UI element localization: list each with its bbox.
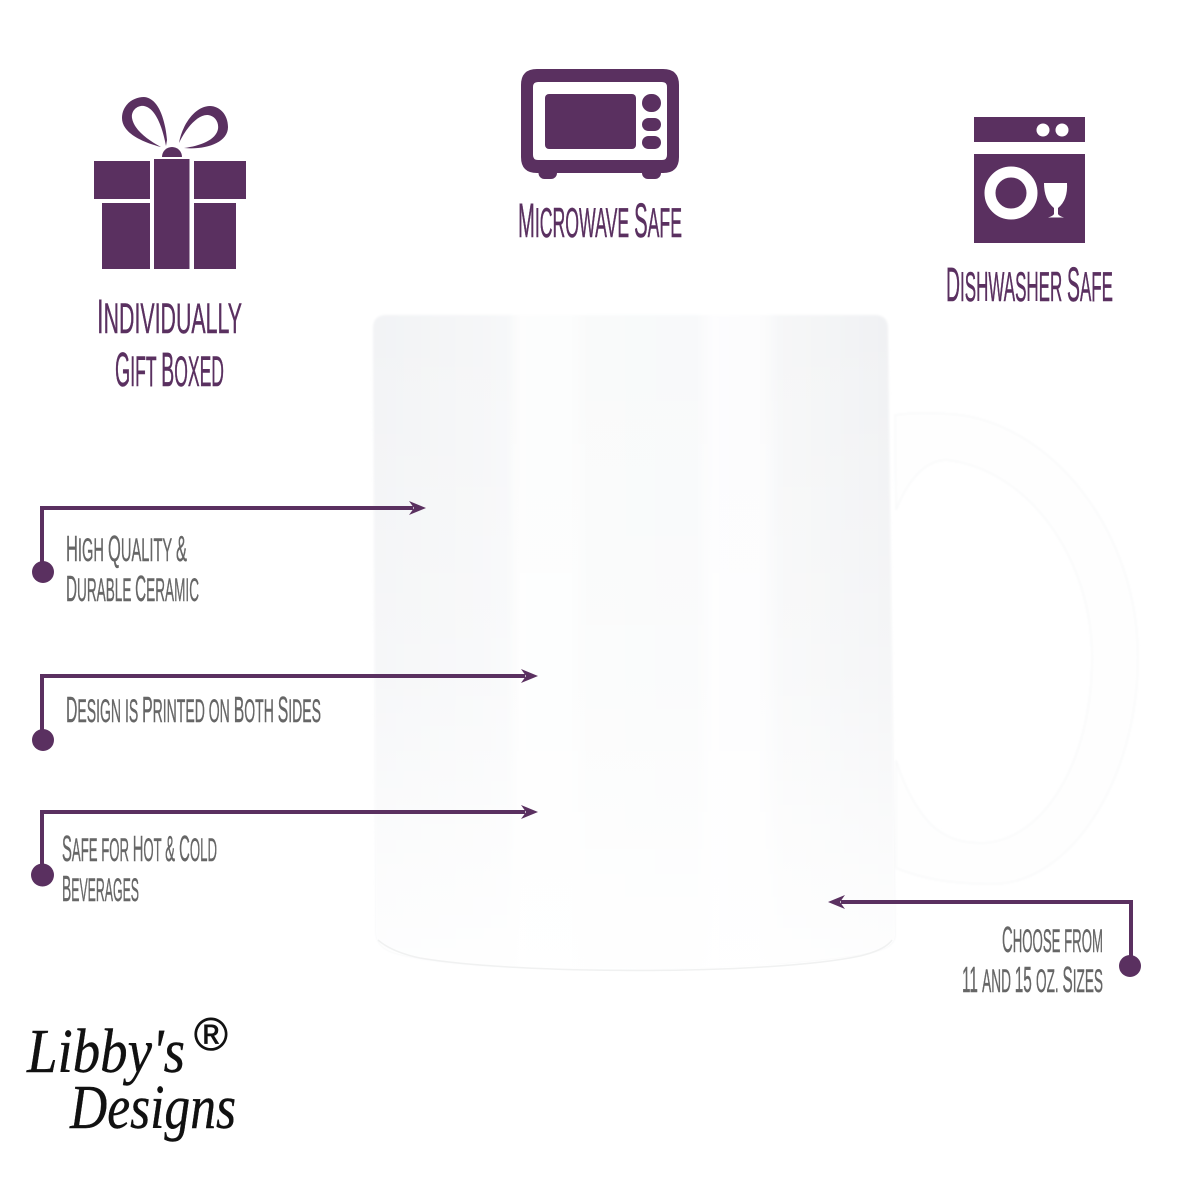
icon: microwave: [521, 69, 679, 179]
mug base edge: [378, 940, 892, 971]
mug illustration: [373, 315, 1138, 971]
callout: safe for hot and cold beverages: [31, 805, 538, 909]
registered mark: ®: [194, 1008, 228, 1060]
mug body: [373, 315, 895, 969]
logo: Libby's Designs: Libby's: [26, 1018, 185, 1086]
logo: Libby's Designs: [26, 1008, 236, 1142]
callout: high quality and durable ceramic: [32, 501, 426, 609]
callout: high quality and durable ceramic: DURABLE CERAMIC: [66, 568, 199, 609]
callout: safe for hot and cold beverages: BEVERAGES: [62, 868, 139, 909]
callout: design printed on both sides: [32, 669, 538, 751]
callout: high quality and durable ceramic: HIGH QUALITY &: [66, 528, 187, 569]
icon: gift box: [94, 97, 246, 269]
mug handle: [895, 413, 1138, 884]
icon: dishwasher: [974, 117, 1085, 243]
callout: choose from 11 and 15 oz sizes: [828, 895, 1141, 1000]
callout: design printed on both sides: DESIGN IS PRINTED ON BOTH SIDES: [66, 689, 321, 730]
callout: choose from 11 and 15 oz sizes: 11 AND 15 OZ. SIZES: [962, 959, 1103, 1000]
label: microwave safe: MICROWAVE SAFE: [518, 195, 682, 248]
logo: Libby's Designs: Designs: [69, 1074, 236, 1142]
label: individually gift boxed: INDIVIDUALLY: [97, 291, 242, 344]
callout: safe for hot and cold beverages: SAFE FOR HOT & COLD: [62, 828, 217, 869]
label: individually gift boxed: GIFT BOXED: [115, 344, 224, 397]
label: individually gift boxed: [97, 291, 242, 397]
